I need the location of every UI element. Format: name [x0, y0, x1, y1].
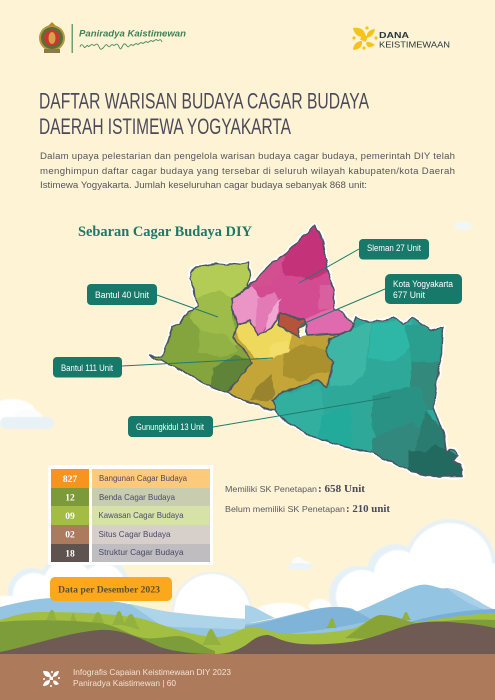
- intro paragraph: Istimewa Yogyakarta. Jumlah keseluruhan cagar budaya sebanyak 868 unit:: [40, 180, 367, 191]
- row: Bangunan: [51, 469, 210, 488]
- small cloud: [286, 557, 314, 570]
- header: Dana Keistimewaan logo: DANA: [379, 30, 409, 40]
- icon: footer flower: [43, 671, 60, 687]
- row: Kawasan: Kawasan Cagar Budaya: [98, 510, 184, 520]
- row: Kawasan: [51, 506, 210, 525]
- row: Struktur: Struktur Cagar Budaya: [98, 547, 184, 557]
- intro paragraph: [40, 151, 455, 191]
- row: Kawasan: 09: [65, 512, 75, 522]
- region: Kota Yogyakarta: [278, 312, 305, 337]
- row: Bangunan: Bangunan Cagar Budaya: [99, 473, 187, 483]
- SK status: with decree: Memiliki SK Penetapan: [225, 484, 317, 494]
- header: Paniradya Kaistimewan logo: [39, 22, 186, 53]
- cloud: top right small: [454, 222, 472, 230]
- callout: Bantul 40 Unit: [87, 284, 157, 305]
- clouds behind hills: [0, 519, 495, 652]
- row: Benda: 12: [65, 494, 75, 504]
- map heading: Sebaran Cagar Budaya DIY: [78, 224, 253, 240]
- footer: Paniradya Kaistimewan | 60: [73, 679, 176, 688]
- SK status: without decree: Belum memiliki SK Penetapan: [225, 504, 345, 514]
- legend table: [48, 465, 213, 565]
- date badge: [50, 577, 172, 601]
- SK status: without decree: [225, 504, 391, 515]
- SK status: with decree: : 658 Unit: [318, 484, 366, 495]
- title: [39, 88, 369, 139]
- row: Situs: Situs Cagar Budaya: [98, 529, 171, 539]
- row: Struktur: [51, 544, 210, 562]
- region outlines: [149, 225, 462, 477]
- callout: Kota Yogyakarta 677 Unit: [385, 274, 462, 304]
- footer: Infografis Capaian Keistimewaan DIY 2023: [73, 668, 231, 677]
- title: DAFTAR WARISAN BUDAYA CAGAR BUDAYA: [39, 88, 369, 114]
- trees: [46, 610, 411, 645]
- callout: Bantul 40 Unit: Bantul 40 Unit: [95, 290, 150, 300]
- callout lines: [122, 249, 391, 427]
- intro paragraph: menghimpun daftar cagar budaya yang tersebar di seluruh wilayah kabupaten/kota Daerah: [40, 166, 455, 177]
- icon: yellow flower: [352, 26, 378, 50]
- row: Situs: 02: [65, 530, 75, 540]
- region: Sleman: [232, 226, 353, 334]
- row: Benda: [51, 488, 210, 506]
- footer: [0, 654, 495, 700]
- header: Dana Keistimewaan logo: KEISTIMEWAAN: [379, 40, 450, 50]
- header: Dana Keistimewaan logo: [352, 26, 450, 50]
- callout: Sleman 27 Unit: Sleman 27 Unit: [367, 243, 421, 253]
- row: Situs: [51, 525, 210, 544]
- callout: Bantul 111 Unit: Bantul 111 Unit: [61, 363, 113, 373]
- dark green hills: [0, 620, 215, 655]
- far mountains: [0, 598, 250, 645]
- map of DIY: [145, 220, 465, 480]
- landscape: [0, 519, 495, 655]
- region: Bantul: [228, 320, 338, 410]
- callout: Bantul 111 Unit: [53, 357, 122, 378]
- brown ridge: [0, 622, 495, 655]
- SK status: without decree: : 210 unit: [346, 504, 391, 515]
- row: Benda: Benda Cagar Budaya: [99, 492, 175, 502]
- callout: Kota Yogyakarta 677 Unit: 677 Unit: [393, 290, 426, 300]
- region: Gunungkidul: [270, 315, 465, 480]
- row: Struktur: 18: [65, 550, 75, 560]
- map white halo: [149, 225, 462, 477]
- cloud: left mid: [0, 399, 54, 429]
- callout: Sleman 27 Unit: [359, 239, 429, 260]
- icon: crest: [39, 22, 65, 53]
- bright green hills: [0, 612, 495, 655]
- title: DAERAH ISTIMEWA YOGYAKARTA: [39, 114, 291, 139]
- date badge: Data per Desember 2023: [58, 586, 160, 596]
- region: Kulon Progo: [154, 263, 251, 392]
- callout: Kota Yogyakarta 677 Unit: Kota Yogyakarta: [393, 279, 453, 289]
- SK status: with decree: [225, 484, 366, 495]
- intro paragraph: Dalam upaya pelestarian dan pengelola warisan budaya cagar budaya, pemerintah DIY telah: [40, 151, 455, 162]
- callout: Gunungkidul 13 Unit: Gunungkidul 13 Unit: [136, 422, 204, 432]
- callout: Gunungkidul 13 Unit: [128, 416, 213, 437]
- logo name: Paniradya Kaistimewan: [79, 28, 186, 40]
- row: Bangunan: 827: [63, 475, 77, 485]
